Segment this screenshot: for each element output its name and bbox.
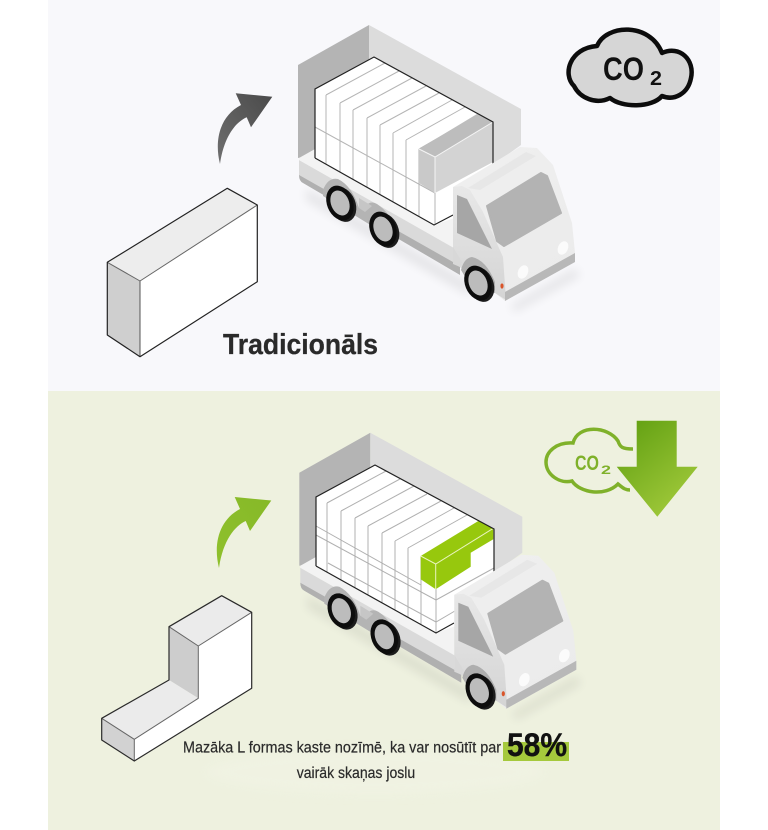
truck: L-shaped box load <box>299 433 581 720</box>
green L-shaped box <box>421 521 493 589</box>
cargo: traditional boxes <box>315 57 493 225</box>
icon: CO2 cloud: CO <box>603 51 644 87</box>
icon: CO2 cloud <box>569 30 692 105</box>
icon: L-shaped box <box>102 596 252 761</box>
heading: Tradicionāls: Tradicionāls <box>223 329 378 361</box>
cargo: boxes with green L box <box>316 465 494 633</box>
truck: traditional load <box>298 25 580 312</box>
icon: traditional rectangular box <box>107 188 257 357</box>
text block: L box message <box>183 727 569 794</box>
icon: green CO2 cloud with down arrow <box>546 421 698 517</box>
highlight: 58%: 58% <box>507 727 567 763</box>
icon: CO2 cloud: 2 <box>650 68 662 90</box>
panel: traditional background <box>48 0 720 391</box>
text block: L box message: vairāk skaņas joslu <box>297 765 415 782</box>
panel: L-shaped box background <box>48 391 720 830</box>
arrow: dark curved arrow <box>218 93 272 164</box>
icon: green CO2 cloud with down arrow: CO <box>575 452 599 475</box>
text block: L box message: Mazāka L formas kaste nozīmē, ka var nosūtīt par <box>183 740 501 757</box>
arrow: green curved arrow <box>217 497 271 568</box>
icon: green CO2 cloud with down arrow: 2 <box>601 463 611 477</box>
